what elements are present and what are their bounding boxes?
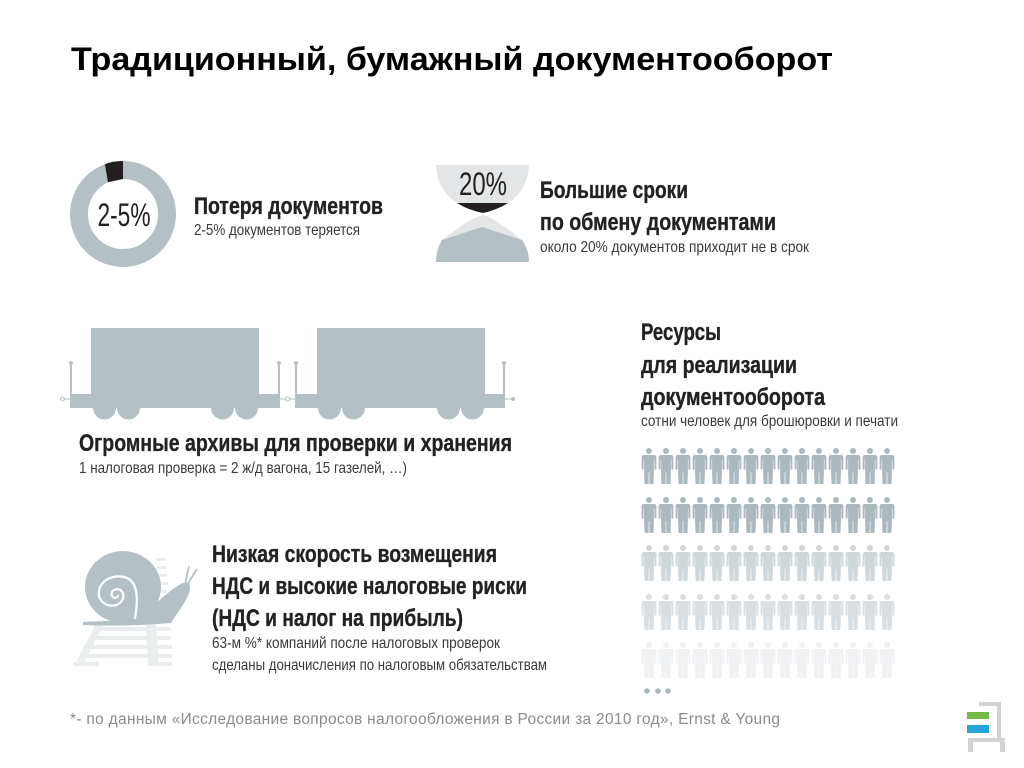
text: VAT refund detail xyxy=(212,635,547,674)
title: Традиционный, бумажный документооборот xyxy=(71,41,833,77)
row 3 xyxy=(642,545,894,581)
heading: resources xyxy=(641,319,825,411)
heading: resources: документооборота xyxy=(641,384,825,411)
panel: VAT refund speed xyxy=(73,541,547,674)
text: archives detail: 1 налоговая проверка = 2 ж/д вагона, 15 газелей, …) xyxy=(79,460,407,477)
icon: hourglass xyxy=(436,165,529,262)
text: long exchange detail: около 20% документов приходит не в срок xyxy=(540,239,810,256)
text: document loss detail: 2-5% документов теряется xyxy=(194,222,360,239)
heading: long exchange times xyxy=(540,177,776,236)
row 1 xyxy=(642,448,894,484)
icon: hourglass: 20% xyxy=(459,166,507,202)
heading: VAT refund: (НДС и налог на прибыль) xyxy=(212,605,463,632)
rails xyxy=(73,558,172,666)
heading: VAT refund: НДС и высокие налоговые риски xyxy=(212,573,527,600)
heading: resources: Ресурсы xyxy=(641,319,721,346)
text: VAT refund detail: сделаны доначисления по налоговым обязательствам xyxy=(212,657,547,674)
text: VAT refund detail: 63-м %* компаний после налоговых проверок xyxy=(212,635,501,652)
body xyxy=(83,583,190,626)
heading: resources: для реализации xyxy=(641,352,797,379)
panel: archives xyxy=(60,328,515,477)
heading: VAT refund xyxy=(212,541,527,632)
shell spiral xyxy=(99,576,137,618)
icon: logo xyxy=(967,702,1005,752)
ellipsis dots xyxy=(644,688,671,694)
tentacles xyxy=(185,566,197,585)
heading: VAT refund: Низкая скорость возмещения xyxy=(212,541,497,568)
row 2 xyxy=(642,497,894,533)
heading: long exchange times: по обмену документами xyxy=(540,209,776,236)
icon: train wagons xyxy=(60,328,515,420)
donut chart: 2-5% xyxy=(79,161,167,258)
panel: document loss xyxy=(79,161,383,258)
row 4 xyxy=(642,594,894,630)
donut chart: 2-5%: 2-5% xyxy=(98,197,150,233)
shell xyxy=(85,551,161,623)
heading: long exchange times: Большие сроки xyxy=(540,177,688,204)
icon: wagon 2 xyxy=(280,328,515,420)
row 5 xyxy=(642,642,894,678)
panel: long exchange times xyxy=(436,165,810,262)
icon: snail on rails xyxy=(73,551,197,666)
footnote: *- по данным «Исследование вопросов налогообложения в России за 2010 год», Ernst & Young xyxy=(70,711,780,728)
pictogram: rows of people xyxy=(642,448,894,694)
icon: wagon 1 xyxy=(60,328,281,420)
heading: archives: Огромные архивы для проверки и хранения xyxy=(79,430,512,457)
text: resources detail: сотни человек для брошюровки и печати xyxy=(641,413,898,430)
panel: resources xyxy=(641,319,898,694)
heading: document loss: Потеря документов xyxy=(194,193,383,220)
